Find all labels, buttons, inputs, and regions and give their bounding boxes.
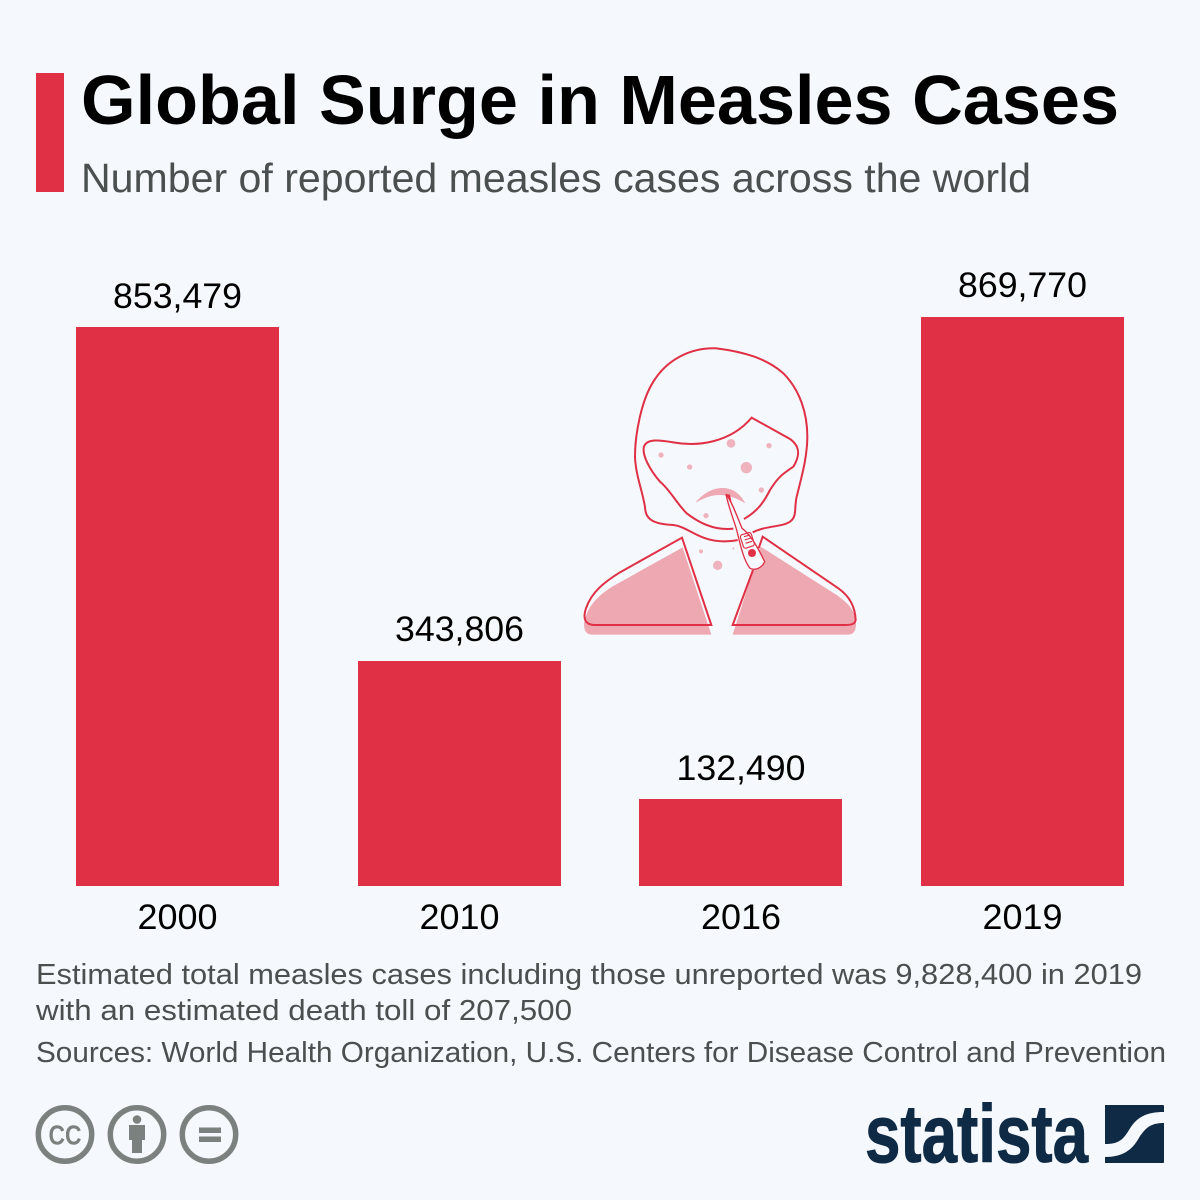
bar: 2019: [921, 266, 1124, 937]
thermometer: [725, 494, 765, 569]
logo mark: [1105, 1105, 1164, 1144]
subtitle: Number of reported measles cases across the world: [81, 155, 1031, 201]
icon: attribution: [110, 1108, 164, 1161]
bar: 2016: 132,490: [676, 749, 806, 788]
shoulder outlines: [585, 537, 856, 625]
bar: 2019: 869,770: [958, 266, 1087, 305]
bar chart: [76, 266, 1124, 937]
bar: 2000: [76, 277, 279, 937]
sources: Sources: World Health Organization, U.S. Centers for Disease Control and Prevention: [36, 1037, 1166, 1069]
rash spots: [658, 439, 772, 570]
bar: 2016: 2016: [701, 898, 781, 937]
bar: 2016: [639, 749, 842, 937]
title: Global Surge in Measles Cases: [81, 61, 1119, 139]
icon: no derivatives: [182, 1108, 236, 1161]
shoulder fills: [584, 547, 856, 635]
hair outline: [635, 348, 807, 541]
bar: 2010: 2010: [420, 898, 500, 937]
face outline: [644, 418, 798, 529]
note text: Estimated total measles cases including those unreported was 9,828,400 in 2019: [36, 959, 1142, 991]
bar: 2000: 853,479: [113, 277, 242, 316]
wordmark: statista: [865, 1089, 1089, 1180]
note text: [35, 959, 1142, 1027]
note text: with an estimated death toll of 207,500: [35, 995, 572, 1027]
icon: creative commons: [38, 1108, 92, 1161]
bar: 2010: [358, 610, 561, 937]
frowning mouth: [695, 488, 745, 503]
bar: 2010: 343,806: [395, 610, 524, 649]
bar: 2000: 2000: [138, 898, 218, 937]
icon: person with measles rash and thermometer: [584, 348, 856, 635]
icon: creative commons: CC: [48, 1120, 82, 1150]
title accent bar: [36, 73, 64, 192]
statista logo: [865, 1089, 1164, 1180]
bar: 2019: 2019: [982, 898, 1062, 937]
